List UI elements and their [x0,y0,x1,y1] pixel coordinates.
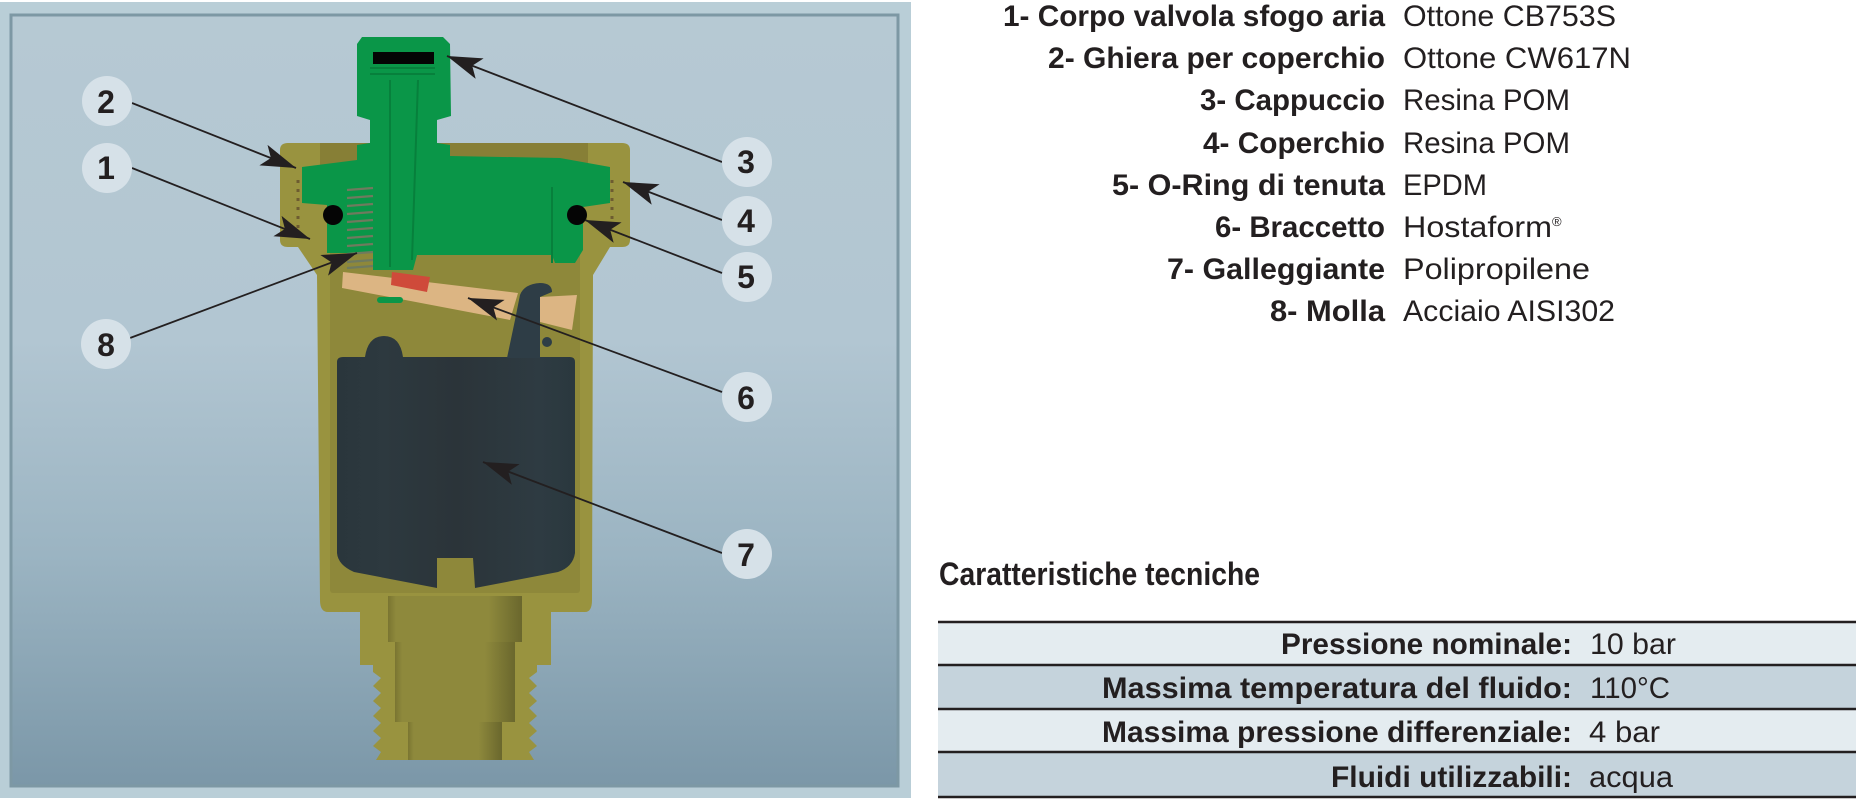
part 6: ® [1552,214,1562,229]
row: nominal pressure: Pressione nominale: [1281,628,1572,661]
number badge 6 [722,372,772,422]
part 2 [1048,42,1631,75]
part 6 [1215,211,1562,244]
number badge 4 [722,196,772,246]
part 8: 8- Molla [1270,295,1385,328]
arrow: callout 1 [132,168,310,239]
valve body: brass shell [280,143,630,760]
part 6: Hostaform [1403,211,1552,244]
row: usable fluids: Fluidi utilizzabili: [1331,761,1572,794]
part 3: 3- Cappuccio [1200,84,1385,117]
number badge 4: 4 [737,203,755,239]
part 5: EPDM [1403,169,1487,202]
row: maximum differential pressure: 4 bar [1589,716,1660,749]
part 6: 6- Braccetto [1215,211,1385,244]
part 5: 5- O-Ring di tenuta [1112,169,1385,202]
part 3 [1200,84,1570,117]
arrow: callout 3 [447,56,722,162]
number badge 2: 2 [97,84,115,120]
arrow: callout 2 [132,103,296,168]
number badge 1: 1 [97,150,115,186]
row: nominal pressure [938,622,1856,665]
part 7 [1167,253,1590,286]
cover and cap [302,37,610,270]
part 2: 2- Ghiera per coperchio [1048,42,1385,75]
row: maximum differential pressure [938,709,1856,752]
row: maximum fluid temperature: Massima temperatura del fluido: [1102,672,1572,705]
row: usable fluids: acqua [1589,761,1673,794]
number badge 2 [82,76,132,126]
number badge 5: 5 [737,259,755,295]
number badge 8: 8 [97,327,115,363]
arrow: callout 5 [585,220,722,273]
inner gradient background [11,15,898,786]
row: maximum differential pressure: Massima pressione differenziale: [1102,716,1572,749]
float [337,283,575,588]
number badge 5 [722,252,772,302]
part 1: Ottone CB753S [1403,0,1616,33]
number badge 1 [82,143,132,193]
arrow: callout 6 [468,298,722,392]
arrow: callout 7 [483,462,722,553]
part 3: Resina POM [1403,84,1570,117]
number badge 3: 3 [737,144,755,180]
part 1: 1- Corpo valvola sfogo aria [1003,0,1385,33]
number badge 6: 6 [737,380,755,416]
part 4 [1203,127,1570,160]
panel: valve cross-section diagram [0,2,911,798]
arrow: callout 8 [130,253,357,338]
row: usable fluids [938,752,1856,797]
row: maximum fluid temperature [938,665,1856,709]
part 1 [1003,0,1616,33]
number badge 3 [722,137,772,187]
arrow: callout 4 [623,182,722,220]
row: nominal pressure: 10 bar [1590,628,1676,661]
spring [347,188,373,268]
table: technical data [938,620,1856,798]
part 7: Polipropilene [1403,253,1590,286]
part 4: Resina POM [1403,127,1570,160]
part 8 [1270,295,1615,328]
lever arm [342,272,577,330]
number badge 7: 7 [737,537,755,573]
part 7: 7- Galleggiante [1167,253,1385,286]
number badge 8 [81,319,131,369]
part 2: Ottone CW617N [1403,42,1631,75]
number badge 7 [722,529,772,579]
parts list [1003,0,1631,328]
part 4: 4- Coperchio [1203,127,1385,160]
outer frame [0,2,911,798]
part 8: Acciaio AISI302 [1403,295,1615,328]
row: maximum fluid temperature: 110°C [1590,672,1670,705]
